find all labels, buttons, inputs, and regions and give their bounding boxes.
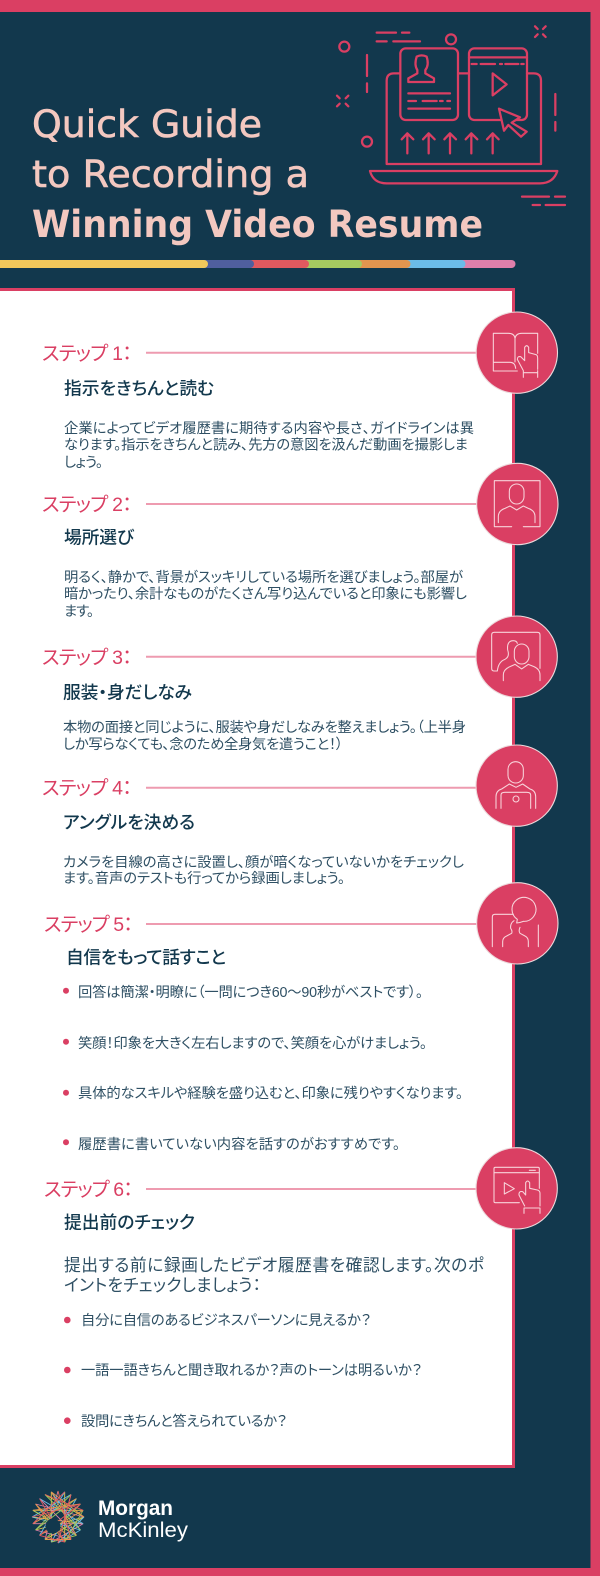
step 2 body: 明るく、静かで、背景がスッキリしている場所を選びましょう。部屋が bbox=[64, 569, 463, 586]
icon: person in frame bbox=[477, 463, 558, 545]
step 2 body bbox=[64, 569, 467, 620]
step 5 bullet list: 回答は簡潔・明瞭に（一問につき60～90秒がベストです）。 bbox=[78, 984, 423, 1001]
step 2 label: ステップ 2： bbox=[42, 494, 132, 516]
colour bar bbox=[0, 260, 516, 268]
step 6 intro: 提出する前に録画したビデオ履歴書を確認します。次のポ bbox=[64, 1255, 484, 1275]
step 5 heading: 自信をもって話すこと bbox=[66, 948, 226, 968]
step 4 heading: アングルを決める bbox=[63, 812, 195, 832]
step 3 heading: 服装・身だしなみ bbox=[63, 682, 192, 702]
step 6 intro: イントをチェックしましょう： bbox=[64, 1276, 261, 1295]
title: to Recording a bbox=[32, 153, 309, 196]
step 2 heading: 場所選び bbox=[64, 528, 135, 548]
step 3 label: ステップ 3： bbox=[42, 647, 132, 669]
title: Quick Guide bbox=[32, 103, 262, 146]
title bbox=[32, 103, 483, 246]
step 6 bullet list bbox=[64, 1312, 422, 1430]
step 3 bbox=[42, 647, 478, 753]
step 6 bullet list: 設問にきちんと答えられているか？ bbox=[81, 1413, 287, 1430]
step 1 heading: 指示をきちんと読む bbox=[64, 378, 214, 398]
step 5 label: ステップ 5： bbox=[44, 914, 133, 936]
icon: book and pointing hand bbox=[476, 312, 557, 393]
step 3 body: しか写らなくても、念のため全身気を遣うこと！） bbox=[63, 736, 343, 753]
icon: person with speech bubble bbox=[477, 883, 558, 964]
step 1 body: しょう。 bbox=[64, 455, 103, 471]
step 3 body: 本物の面接と同じように、服装や身だしなみを整えましょう。（上半身 bbox=[63, 719, 466, 736]
step 6 heading: 提出前のチェック bbox=[64, 1212, 195, 1232]
step 2 bbox=[42, 494, 478, 620]
step 1 body bbox=[64, 419, 474, 471]
icon: laptop with resume and video illustration bbox=[337, 26, 565, 205]
step 1 body: なります。指示をきちんと読み、先方の意図を汲んだ動画を撮影しま bbox=[64, 436, 468, 454]
step 4 body: ます。音声のテストも行ってから録画しましょう。 bbox=[63, 869, 345, 887]
step 2 body: 暗かったり、余計なものがたくさん写り込んでいると印象にも影響し bbox=[64, 586, 467, 602]
step 1 bbox=[42, 343, 478, 471]
logo wordmark bbox=[98, 1497, 189, 1542]
logo mark bbox=[32, 1491, 84, 1543]
step 4 body bbox=[63, 854, 464, 887]
icon: two people on screen bbox=[476, 616, 557, 697]
step 6 intro bbox=[64, 1255, 484, 1295]
step 5 bullet list: 履歴書に書いていない内容を話すのがおすすめです。 bbox=[78, 1136, 400, 1153]
logo wordmark: McKinley bbox=[98, 1519, 189, 1542]
step 4 bbox=[42, 778, 478, 887]
step 6 bullet list: 一語一語きちんと聞き取れるか？声のトーンは明るいか？ bbox=[81, 1361, 422, 1379]
icon: person with laptop bbox=[476, 745, 557, 826]
step 6 bullet list: 自分に自信のあるビジネスパーソンに見えるか？ bbox=[81, 1312, 371, 1329]
step 1 body: 企業によってビデオ履歴書に期待する内容や長さ、ガイドラインは異 bbox=[64, 419, 474, 437]
step 5 bullet list: 笑顔！印象を大きく左右しますので、笑顔を心がけましょう。 bbox=[78, 1035, 427, 1052]
step 1 label: ステップ 1： bbox=[42, 343, 132, 365]
step 3 body bbox=[63, 719, 466, 753]
step 6 label: ステップ 6： bbox=[44, 1179, 133, 1201]
logo wordmark: Morgan bbox=[98, 1497, 173, 1520]
panel: steps bbox=[0, 288, 515, 1468]
step 5 bullet list: 具体的なスキルや経験を盛り込むと、印象に残りやすくなります。 bbox=[78, 1085, 463, 1102]
icon: video window and hand bbox=[476, 1148, 557, 1229]
step 6 bbox=[44, 1179, 484, 1430]
step 2 body: ます。 bbox=[64, 603, 94, 620]
title: Winning Video Resume bbox=[32, 203, 483, 246]
step 5 bullet list bbox=[63, 984, 463, 1153]
step 4 body: カメラを目線の高さに設置し、顔が暗くなっていないかをチェックし bbox=[63, 854, 464, 871]
step 4 label: ステップ 4： bbox=[42, 778, 132, 800]
step 5 bbox=[44, 914, 478, 1153]
